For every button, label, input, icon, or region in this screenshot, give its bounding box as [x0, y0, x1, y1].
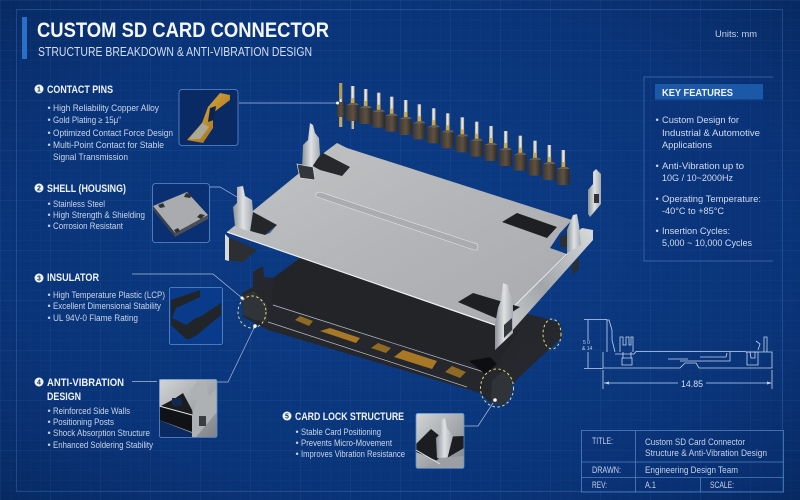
number badge 4: 4	[37, 380, 41, 386]
title block table: TITLE:	[592, 436, 613, 446]
bullet list: •	[296, 438, 299, 448]
panel: insulator	[34, 272, 222, 344]
top face	[227, 143, 572, 325]
feature: custom design: Custom Design for	[662, 114, 739, 125]
bullet list: •	[48, 440, 51, 450]
thumbnail: card lock	[416, 413, 464, 468]
title block table	[582, 430, 784, 492]
number badge 2: 2	[37, 186, 41, 192]
insulator frame	[242, 258, 562, 405]
title block table: SCALE:	[710, 480, 734, 490]
number badge 1: 1	[37, 86, 41, 94]
bullet list: Reinforced Side Walls	[53, 406, 130, 416]
exploded connector illustration	[225, 83, 601, 407]
bullet list: •	[48, 301, 51, 311]
title: CUSTOM SD CARD CONNECTOR	[37, 19, 329, 42]
feature: custom design: Industrial & Automotive	[662, 127, 760, 138]
thumbnail: gold contact pin	[179, 90, 238, 146]
bullet list: •	[48, 103, 51, 113]
thumbnail: anti-vibration corner	[159, 379, 217, 437]
title block table: Engineering Design Team	[645, 465, 738, 475]
feature: temperature: -40°C to +85°C	[662, 205, 724, 216]
feature: custom design	[656, 114, 760, 150]
feature: custom design: Applications	[662, 139, 712, 150]
thumbnail: shell	[152, 184, 210, 242]
technical side-view drawing	[582, 320, 772, 389]
heading: ANTI-VIBRATION	[47, 377, 124, 389]
number badge 5: 5	[285, 414, 289, 420]
leader lines	[132, 103, 495, 426]
bullet list: Positioning Posts	[53, 417, 114, 427]
heading: CARD LOCK STRUCTURE	[295, 411, 404, 423]
feature: insertion cycles: •	[656, 225, 659, 236]
height dimension: & 14	[582, 346, 593, 352]
bullet list: •	[48, 417, 51, 427]
feature: custom design: •	[656, 114, 659, 125]
bullet list: Improves Vibration Resistance	[301, 449, 405, 459]
bullet list	[48, 199, 145, 231]
heading: CONTACT PINS	[47, 84, 113, 96]
feature: temperature: Operating Temperature:	[662, 193, 761, 204]
panel: anti-vibration design: DESIGN	[47, 391, 81, 403]
height dimension: 5 0	[583, 340, 590, 346]
thumbnail: insulator	[170, 288, 222, 344]
heading: KEY FEATURES	[662, 87, 733, 99]
height dimension	[582, 340, 593, 352]
number badge 4	[34, 378, 44, 386]
left lip	[225, 237, 257, 262]
loose terminal	[588, 169, 601, 217]
width dimension: 14.85	[681, 379, 703, 389]
bullet list: High Temperature Plastic (LCP)	[53, 290, 165, 300]
bullet list: •	[48, 115, 51, 125]
heading: INSULATOR	[47, 272, 99, 284]
title block table: DRAWN:	[592, 465, 621, 475]
bullet list: Prevents Micro-Movement	[301, 438, 392, 448]
panel: anti-vibration design	[34, 377, 217, 450]
title block table: REV:	[592, 480, 607, 490]
bullet list: Multi-Point Contact for Stable	[53, 140, 164, 150]
bullet list: Stable Card Positioning	[301, 427, 381, 437]
bullet list: High Reliability Copper Alloy	[53, 103, 159, 113]
bullet list: Stainless Steel	[53, 199, 105, 209]
title block table: Structure & Anti-Vibration Design	[645, 448, 767, 458]
panel: shell housing	[34, 183, 210, 242]
slot	[316, 192, 478, 250]
bullet list: Optimized Contact Force Design	[53, 128, 173, 138]
bullet list	[48, 290, 165, 323]
bullet list: Gold Plating ≥ 15μ"	[53, 115, 121, 125]
heading: SHELL (HOUSING)	[47, 183, 126, 195]
number badge 2	[34, 184, 44, 192]
title block	[22, 17, 329, 59]
bullet list: •	[296, 449, 299, 459]
bullet list: •	[48, 428, 51, 438]
bullet list	[48, 406, 153, 450]
panel: card lock structure	[282, 411, 464, 468]
bullet list: •	[48, 199, 51, 209]
number badge 1	[34, 84, 44, 94]
bullet list: •	[48, 406, 51, 416]
bullet list: Signal Transmission	[53, 152, 128, 162]
title block table: A.1	[645, 480, 656, 490]
feature: temperature	[656, 193, 761, 216]
title block table: Custom SD Card Connector	[645, 437, 745, 447]
pin row	[336, 83, 570, 185]
number badge 3: 3	[37, 276, 41, 282]
number badge 5	[282, 412, 292, 420]
bullet list: Excellent Dimensional Stability	[53, 301, 161, 311]
feature: insertion cycles: 5,000 ~ 10,000 Cycles	[662, 237, 752, 248]
bullet list: Corrosion Resistant	[53, 221, 123, 231]
callout circles	[238, 296, 561, 407]
panel: contact pins	[34, 84, 238, 162]
bullet list	[296, 427, 405, 459]
bullet list: •	[48, 140, 51, 150]
subtitle: STRUCTURE BREAKDOWN & ANTI-VIBRATION DESIGN	[38, 45, 312, 59]
number badge 3	[34, 274, 44, 282]
feature: insertion cycles: Insertion Cycles:	[662, 225, 730, 236]
shell tabs	[302, 123, 320, 168]
bullet list: •	[48, 128, 51, 138]
panel: key features	[644, 77, 773, 261]
feature: anti-vibration	[656, 160, 744, 183]
bullet list: •	[48, 313, 51, 323]
bullet list: High Strength & Shielding	[53, 210, 145, 220]
bullet list: •	[48, 221, 51, 231]
bullet list: •	[48, 210, 51, 220]
feature: temperature: •	[656, 193, 659, 204]
feature: anti-vibration: Anti-Vibration up to	[662, 160, 744, 171]
side wall	[495, 228, 593, 350]
units note: Units: mm	[715, 29, 757, 39]
bullet list: Enhanced Soldering Stability	[53, 440, 153, 450]
bullet list	[48, 103, 173, 162]
bullet list: UL 94V-0 Flame Rating	[53, 313, 138, 323]
feature: insertion cycles	[656, 225, 752, 248]
bullet list: •	[296, 427, 299, 437]
bullet list: Shock Absorption Structure	[53, 428, 150, 438]
heading	[655, 84, 763, 100]
metal shell	[225, 123, 593, 350]
feature: anti-vibration: 10G / 10~2000Hz	[662, 172, 733, 183]
shell windows	[311, 153, 350, 176]
bullet list: •	[48, 290, 51, 300]
width dimension	[603, 370, 772, 389]
feature: anti-vibration: •	[656, 160, 659, 171]
